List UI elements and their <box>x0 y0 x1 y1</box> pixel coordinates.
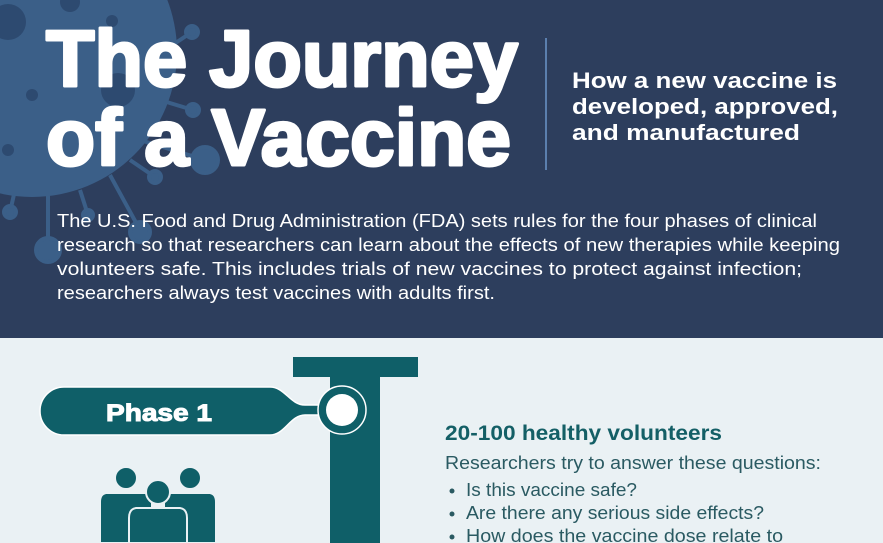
divider <box>545 38 547 170</box>
title: The Journey <box>46 14 518 103</box>
intro paragraph <box>57 211 840 303</box>
title <box>46 14 518 182</box>
subtitle: How a new vaccine is <box>572 68 837 93</box>
title: of a Vaccine <box>46 93 511 182</box>
phase 1 details text: 20-100 healthy volunteers <box>445 422 722 445</box>
intro paragraph: researchers always test vaccines with adults first. <box>57 283 495 303</box>
phase 1 details text: Is this vaccine safe? <box>466 480 637 500</box>
subtitle: and manufactured <box>572 120 800 145</box>
icon: people <box>100 467 216 543</box>
icon: virus decoration <box>0 0 218 262</box>
subtitle: developed, approved, <box>572 94 838 119</box>
intro paragraph: The U.S. Food and Drug Administration (FDA) sets rules for the four phases of clinical <box>57 211 817 231</box>
phase 1 details text: Are there any serious side effects? <box>466 503 764 523</box>
intro paragraph: volunteers safe. This includes trials of new vaccines to protect against infection; <box>57 259 802 279</box>
lower background <box>0 338 883 543</box>
phase 1 details text: Researchers try to answer these questions: <box>445 453 821 473</box>
header background <box>0 0 883 338</box>
intro paragraph: research so that researchers can learn about the effects of new therapies while keeping <box>57 235 840 255</box>
phase 1 details text <box>445 422 821 543</box>
subtitle <box>572 68 838 145</box>
phase 1 label: Phase 1 <box>106 400 212 427</box>
timeline T bar <box>293 357 418 543</box>
phase 1 label <box>40 386 366 435</box>
